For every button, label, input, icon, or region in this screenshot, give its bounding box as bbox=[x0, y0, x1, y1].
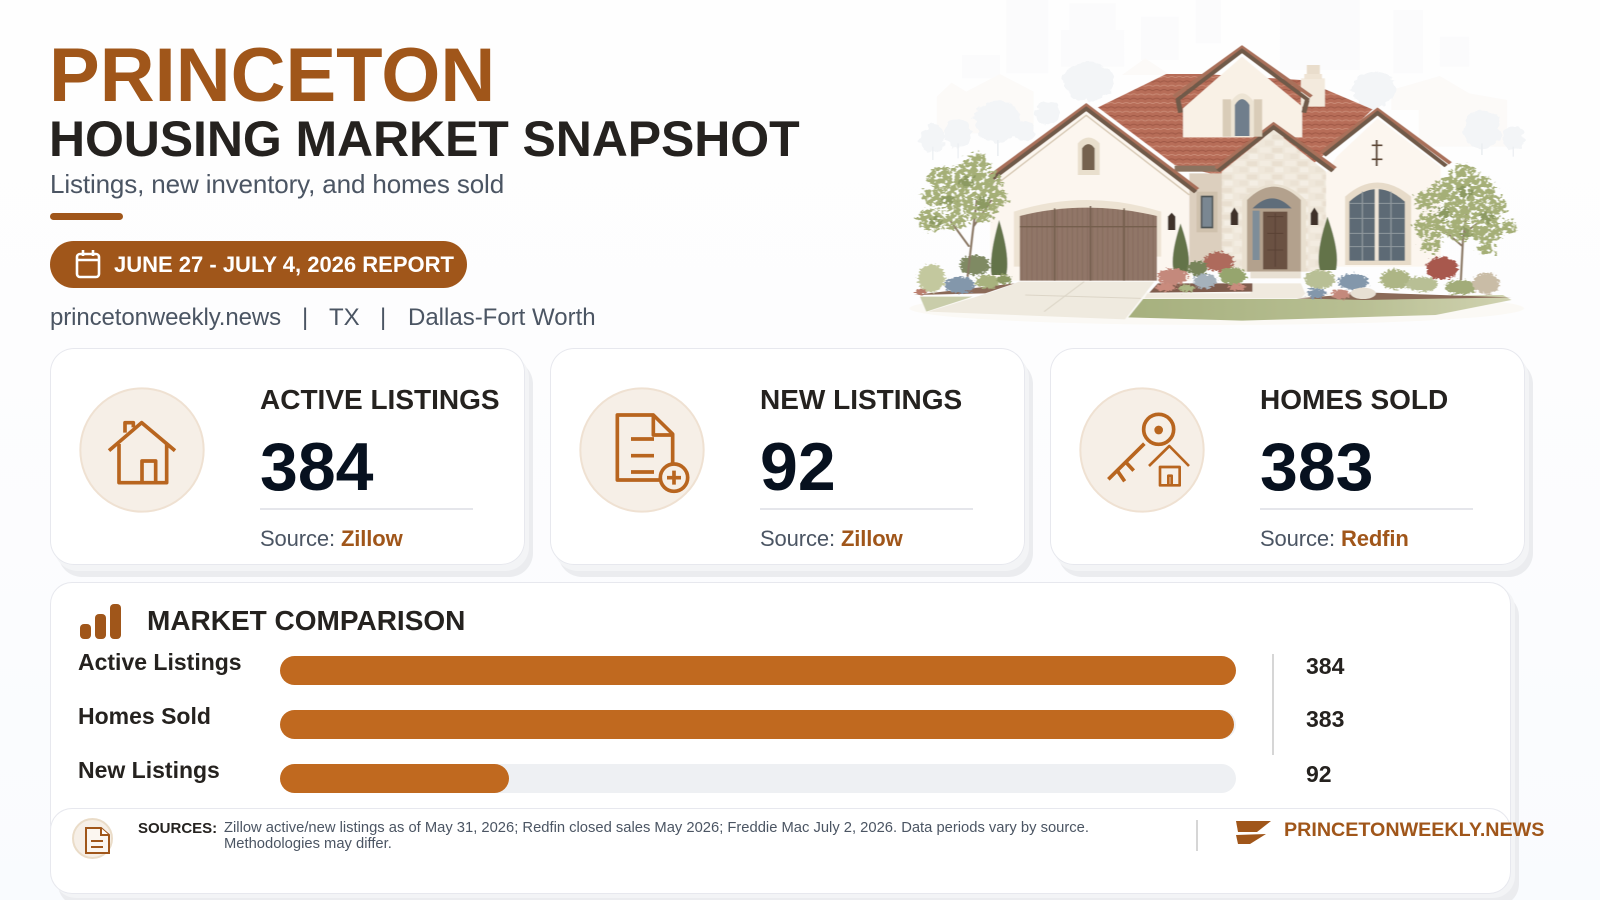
source: Source: Redfin bbox=[1260, 526, 1409, 551]
tree: left bbox=[918, 153, 1009, 277]
lanterns bbox=[1168, 207, 1318, 230]
row label: new listings: New Listings bbox=[78, 756, 220, 782]
bar: new listings bbox=[280, 764, 1236, 793]
stone entry gable bbox=[1222, 130, 1326, 272]
flower beds bbox=[915, 252, 1500, 300]
source: Source: Zillow bbox=[760, 526, 903, 551]
text: sources note: Methodologies may differ. bbox=[224, 836, 392, 852]
garden rock bbox=[1351, 288, 1376, 299]
value: active listings: 384 bbox=[1306, 652, 1344, 678]
value: 92 bbox=[760, 429, 836, 505]
value: 384 bbox=[260, 429, 373, 505]
panel: market comparison bbox=[50, 582, 1511, 894]
icon: sources document bbox=[72, 818, 113, 859]
text: sources note: Zillow active/new listings as of May 31, 2026; Redfin closed sales May 2026; Freddie Mac July 2, 2026. Data periods vary by source. bbox=[224, 820, 1089, 836]
date text: JUNE 27 - JULY 4, 2026 REPORT bbox=[114, 252, 454, 277]
location line: Dallas-Fort Worth bbox=[408, 304, 596, 330]
icon: bar chart bbox=[80, 604, 121, 639]
label: HOMES SOLD bbox=[1260, 384, 1448, 415]
painted house group bbox=[909, 47, 1524, 325]
icon: key and house bbox=[1079, 387, 1205, 513]
title: Princeton: PRINCETON bbox=[49, 33, 495, 118]
panel: homes sold bbox=[1050, 348, 1525, 565]
icon: document plus bbox=[579, 387, 705, 513]
small louvered window bbox=[1078, 138, 1100, 175]
left stucco wing bbox=[990, 112, 1191, 281]
row label: homes sold: Homes Sold bbox=[78, 702, 211, 728]
panel: sources footer bbox=[50, 808, 1511, 894]
value: homes sold: 383 bbox=[1306, 706, 1344, 732]
cypress shrubs bbox=[991, 217, 1337, 275]
text: sources note: SOURCES: bbox=[138, 820, 217, 837]
garage door bbox=[1014, 200, 1161, 281]
ground: lawn, drive and walk bbox=[909, 282, 1524, 325]
label: ACTIVE LISTINGS bbox=[260, 384, 500, 415]
ghost houses and trees bbox=[937, 58, 1507, 147]
bar: active listings bbox=[280, 656, 1236, 685]
ghost skyline bbox=[962, 0, 1469, 78]
main roof bbox=[1098, 74, 1372, 175]
arched window bbox=[1345, 182, 1411, 265]
tree: right bbox=[1415, 164, 1518, 280]
value: 383 bbox=[1260, 429, 1373, 505]
illustration: stone and stucco house bbox=[910, 45, 1526, 325]
panel: active listings bbox=[50, 348, 525, 565]
dormer window bbox=[1223, 93, 1262, 137]
heading: market comparison: MARKET COMPARISON bbox=[147, 605, 465, 636]
right stucco wing bbox=[1326, 118, 1441, 267]
date pill bbox=[50, 241, 467, 288]
source: Source: Zillow bbox=[260, 526, 403, 551]
roof fascia bands bbox=[990, 47, 1450, 195]
location line: | bbox=[302, 304, 308, 330]
label: NEW LISTINGS bbox=[760, 384, 962, 415]
dormer bbox=[1183, 57, 1302, 137]
bar: homes sold bbox=[280, 710, 1236, 739]
location line: | bbox=[380, 304, 386, 330]
cross vent bbox=[1372, 140, 1383, 166]
row label: active listings: Active Listings bbox=[78, 648, 242, 674]
subtitle: Listings, new inventory, and homes sold bbox=[50, 169, 504, 199]
icon: calendar bbox=[76, 250, 100, 278]
panel: new listings bbox=[550, 348, 1025, 565]
location line: TX bbox=[329, 304, 360, 330]
icon: house bbox=[79, 387, 205, 513]
text: sources note bbox=[138, 820, 1089, 852]
value: new listings: 92 bbox=[1306, 760, 1332, 786]
accent bar bbox=[50, 213, 123, 220]
chimney bbox=[1301, 65, 1325, 107]
location line bbox=[50, 304, 596, 330]
location line: princetonweekly.news bbox=[50, 304, 281, 330]
arched entry bbox=[1242, 184, 1306, 278]
brand name: PRINCETONWEEKLY.NEWS bbox=[1284, 819, 1544, 841]
heading: housing market snapshot: HOUSING MARKET SNAPSHOT bbox=[49, 111, 800, 167]
connector window bbox=[1197, 192, 1218, 232]
icon: brand logo bbox=[1236, 821, 1271, 844]
connector recess bbox=[1189, 173, 1225, 267]
